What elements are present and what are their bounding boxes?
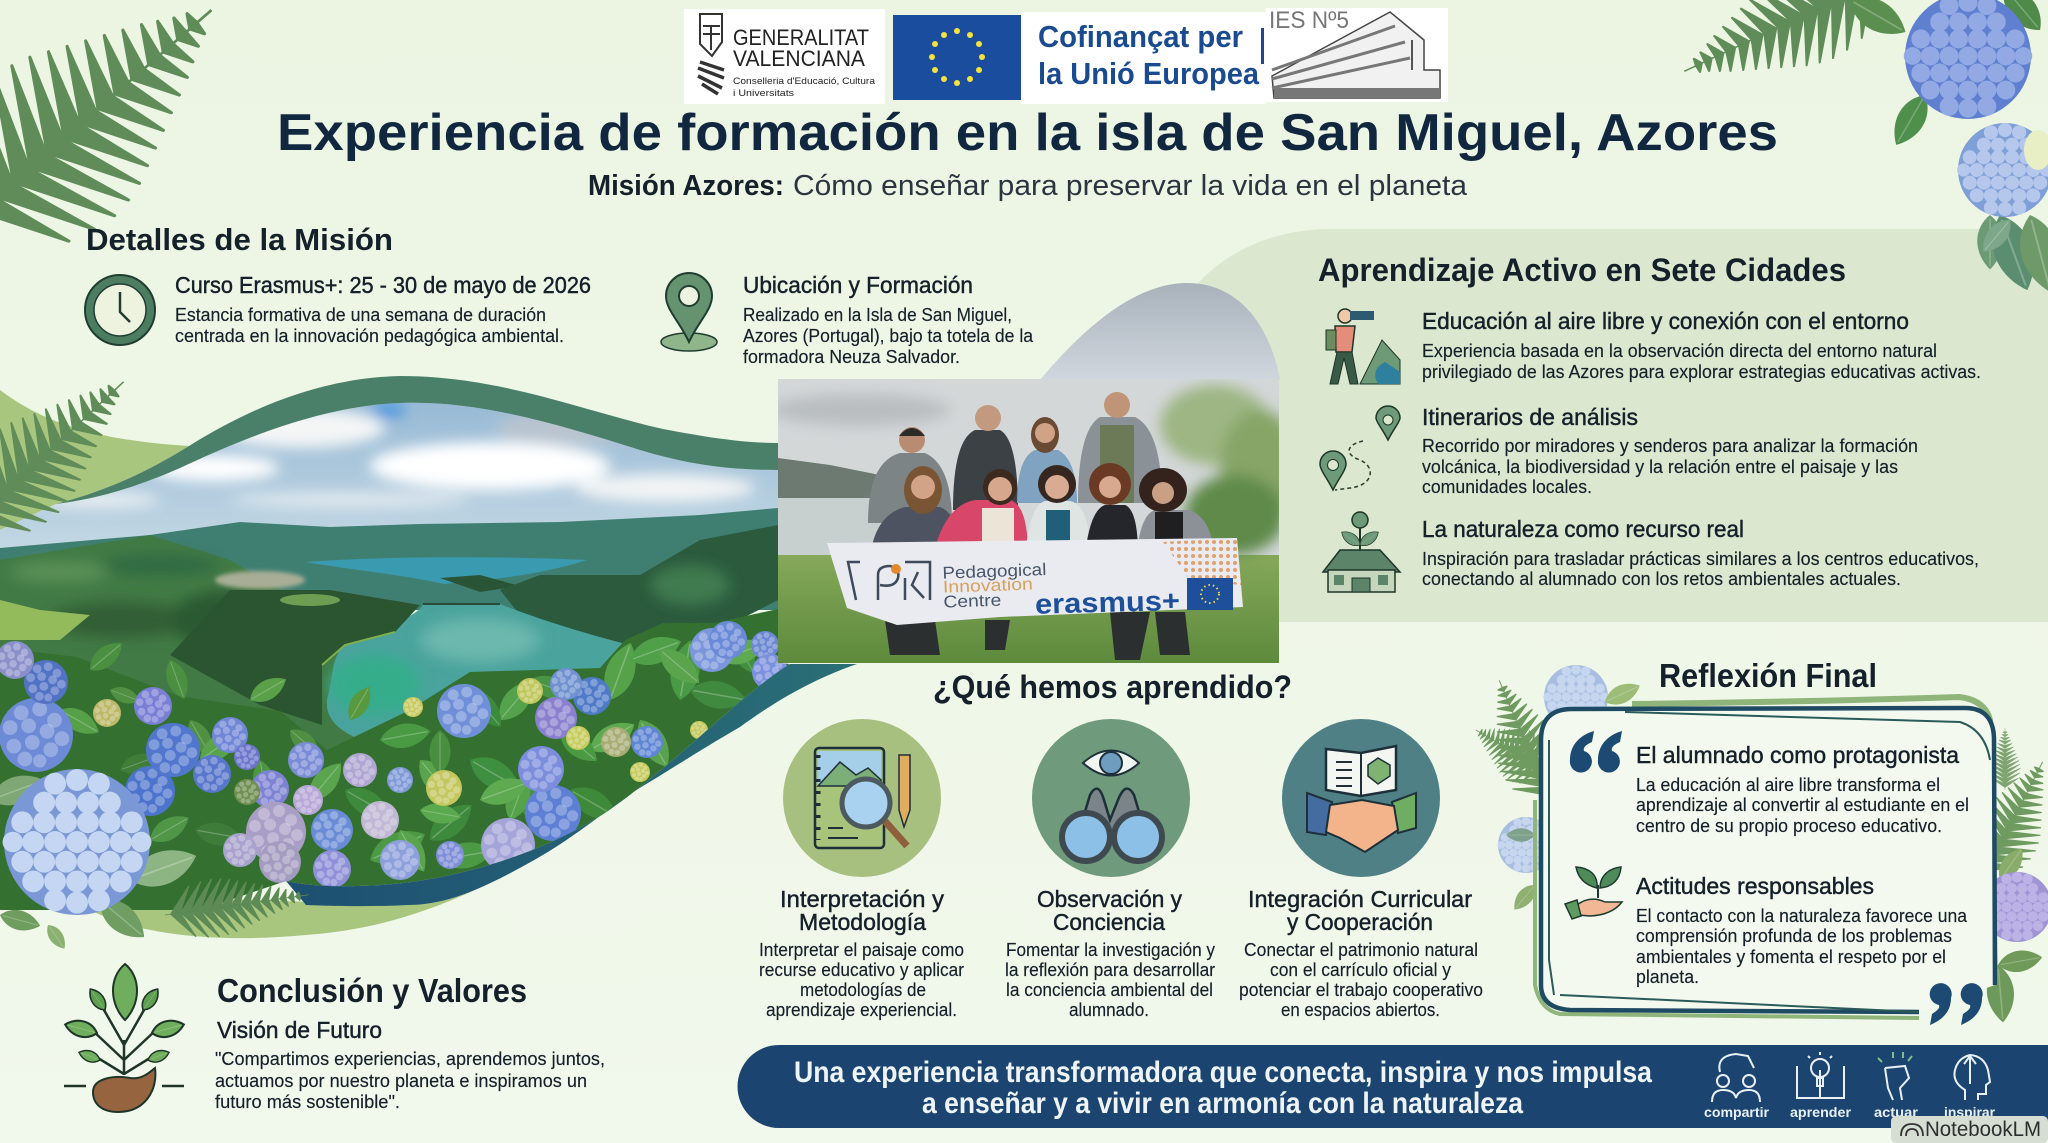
icon: location pin <box>661 273 717 351</box>
text block: Actitudes responsables <box>1636 873 1968 987</box>
florals around Reflexión Final frame <box>1462 665 2048 1024</box>
card: Observación y Conciencia: alumnado. <box>1069 999 1149 1020</box>
text block: La naturaleza como recurso real: Inspiración para trasladar prácticas similares a los centros educativos, <box>1422 548 1979 569</box>
banner: closing message: Una experiencia transformadora que conecta, inspira y nos impulsa <box>794 1056 1652 1089</box>
text block: Itinerarios de análisis: Recorrido por miradores y senderos para analizar la formación <box>1422 435 1918 456</box>
card: Integración Curricular y Cooperación: potenciar el trabajo cooperativo <box>1239 979 1483 1000</box>
card: Integración Curricular y Cooperación: con el carrículo oficial y <box>1270 959 1452 980</box>
card: Interpretación y Metodología: recurse educativo y aplicar <box>759 959 964 980</box>
photo: Erasmus+ banner: Centre <box>943 591 1002 612</box>
card: Interpretación y Metodología: Interpretación y <box>780 886 945 912</box>
card: Observación y Conciencia: Fomentar la investigación y <box>1006 939 1216 960</box>
text block: Conclusión y Valores: "Compartimos experiencias, aprendemos juntos, <box>215 1048 605 1069</box>
text block: El alumnado como protagonista <box>1636 742 1969 836</box>
logo: Generalitat Valenciana: Conselleria d'Educació, Cultura <box>733 76 876 87</box>
icon: clock <box>85 275 155 345</box>
card: Observación y Conciencia <box>1005 719 1216 1020</box>
icon: aprender: aprender <box>1790 1104 1852 1120</box>
icon: actuar <box>1874 1052 1919 1120</box>
logo: IES Nº5: IES Nº5 <box>1269 7 1349 34</box>
icon: book and handshake <box>1282 719 1440 877</box>
text block: Curso Erasmus+: Curso Erasmus+: 25 - 30 de mayo de 2026 <box>175 272 591 298</box>
text block: Curso Erasmus+: centrada en la innovación pedagógica ambiental. <box>175 325 564 346</box>
text block: Actitudes responsables: El contacto con la naturaleza favorece una <box>1636 905 1968 926</box>
icon: plant sprouting from seed <box>63 964 186 1112</box>
fern and big hydrangea, lower left <box>0 768 313 952</box>
text block: El alumnado como protagonista: aprendizaje al convertir al estudiante en el <box>1636 794 1969 815</box>
card: Observación y Conciencia: Conciencia <box>1053 909 1165 935</box>
text block: Ubicación y Formación: Ubicación y Formación <box>743 272 973 298</box>
text block: Itinerarios de análisis: volcánica, la biodiversidad y la relación entre el paisaje y las <box>1422 456 1898 477</box>
logo: Cofinançat per la Unió Europea: la Unió Europea <box>1038 56 1260 91</box>
subtitle: Cómo enseñar para preservar la vida en el planeta <box>793 170 1468 202</box>
logo: EU flag <box>893 15 1021 100</box>
text block: Actitudes responsables: Actitudes responsables <box>1636 873 1874 899</box>
card: Interpretación y Metodología: metodologías de <box>800 979 926 1000</box>
flower bed foliage <box>62 637 756 872</box>
card: Observación y Conciencia: la conciencia ambiental del <box>1006 979 1213 1000</box>
icon: notebook and magnifier <box>783 719 941 877</box>
decorative green swoosh, bottom <box>82 890 475 938</box>
hydrangea blooms <box>0 621 788 915</box>
icon: hiker with binoculars <box>1326 309 1400 384</box>
text block: Conclusión y Valores: Conclusión y Valores <box>217 972 527 1009</box>
icon: hand holding sprout <box>1565 867 1622 919</box>
heading: Aprendizaje Activo en Sete Cidades: Aprendizaje Activo en Sete Cidades <box>1318 252 1846 288</box>
text block: El alumnado como protagonista: El alumnado como protagonista <box>1636 742 1959 768</box>
icon: route between map pins <box>1320 406 1400 490</box>
heading: Qué hemos aprendido: ¿Qué hemos aprendido? <box>933 669 1292 705</box>
icon: compartir: compartir <box>1704 1104 1770 1120</box>
banner: closing message: a enseñar y a vivir en armonía con la naturaleza <box>922 1087 1523 1120</box>
logo: Generalitat Valenciana <box>684 9 885 104</box>
text block: El alumnado como protagonista: centro de su propio proceso educativo. <box>1636 815 1942 836</box>
photo: Erasmus+ banner: erasmus+ <box>1035 585 1180 620</box>
text block: Ubicación y Formación: Azores (Portugal), bajo ta totela de la <box>743 325 1034 346</box>
fern, top left <box>0 0 272 289</box>
text block: Itinerarios de análisis <box>1422 404 1918 497</box>
fern, mid left <box>0 344 158 562</box>
text block: Ubicación y Formación: formadora Neuza Salvador. <box>743 346 960 367</box>
text block: Conclusión y Valores: futuro más sostenible". <box>215 1091 400 1112</box>
card: Interpretación y Metodología: Interpretar el paisaje como <box>759 939 964 960</box>
text block: La naturaleza como recurso real: conectando al alumnado con los retos ambientales actuales. <box>1422 568 1901 589</box>
card: Integración Curricular y Cooperación: Integración Curricular <box>1248 886 1472 912</box>
text block: Educación al aire libre: Experiencia basada en la observación directa del entorno natural <box>1422 340 1937 361</box>
badge: NotebookLM watermark <box>1891 1116 2048 1143</box>
photo: back row people <box>868 392 1162 523</box>
text block: Conclusión y Valores: actuamos por nuestro planeta e inspiramos un <box>215 1070 587 1091</box>
text block: Actitudes responsables: comprensión profunda de los problemas <box>1636 925 1952 946</box>
photo: Erasmus+ banner: Pedagogical <box>942 560 1047 583</box>
title: Experiencia de formación en la isla de San Miguel, Azores <box>277 104 1778 162</box>
card: Interpretación y Metodología <box>759 719 964 1020</box>
photo: Erasmus+ banner: Innovation <box>943 575 1033 597</box>
group photo with Erasmus+ banner <box>770 379 1300 663</box>
text block: La naturaleza como recurso real: La naturaleza como recurso real <box>1422 516 1744 542</box>
logo: Generalitat Valenciana: i Universitats <box>733 88 794 99</box>
badge: NotebookLM watermark: NotebookLM <box>1925 1118 2041 1141</box>
text block: Itinerarios de análisis: comunidades locales. <box>1422 476 1592 497</box>
card: Interpretación y Metodología: aprendizaje experiencial. <box>766 999 957 1020</box>
text block: La naturaleza como recurso real <box>1422 516 1979 589</box>
dark green wave band <box>56 376 778 504</box>
text block: Educación al aire libre <box>1422 308 1981 382</box>
card: Integración Curricular y Cooperación: en espacios abiertos. <box>1281 999 1440 1020</box>
text block: Curso Erasmus+ <box>175 272 591 346</box>
text block: Conclusión y Valores <box>215 972 605 1112</box>
text block: Actitudes responsables: ambientales y fomenta el respeto por el <box>1636 946 1946 967</box>
card: Observación y Conciencia: Observación y <box>1037 886 1182 912</box>
icon: eye and binoculars <box>1032 719 1190 877</box>
text block: Ubicación y Formación: Realizado en la Isla de San Miguel, <box>743 304 1012 325</box>
teal wave band <box>286 664 857 906</box>
logo: IES Nº5 <box>1266 7 1448 102</box>
photo: front row people <box>872 463 1212 542</box>
logo: Cofinançat per la Unió Europea: Cofinançat per <box>1038 19 1243 54</box>
top right floral corner <box>1663 0 2048 297</box>
logo: Generalitat Valenciana: VALENCIANA <box>733 46 865 71</box>
text block: Educación al aire libre: Educación al aire libre y conexión con el entorno <box>1422 308 1909 334</box>
banner: closing message <box>738 1045 2048 1128</box>
photo backdrop: cloudy sky arch <box>1040 283 1280 380</box>
icon: compartir <box>1704 1054 1770 1120</box>
text block: Itinerarios de análisis: Itinerarios de análisis <box>1422 404 1638 430</box>
text block: Actitudes responsables: planeta. <box>1636 966 1699 987</box>
heading: Reflexión Final: Reflexión Final <box>1659 657 1877 694</box>
icon: aprender <box>1790 1052 1852 1120</box>
icon: actuar: actuar <box>1874 1104 1919 1120</box>
landscape: Sete Cidades lakes and hydrangeas <box>0 370 800 915</box>
icon: school with flower <box>1323 512 1400 592</box>
text block: Curso Erasmus+: Estancia formativa de una semana de duración <box>175 304 546 325</box>
photo: Erasmus+ banner <box>827 538 1243 625</box>
text block: Conclusión y Valores: Visión de Futuro <box>217 1017 382 1043</box>
text block: El alumnado como protagonista: La educación al aire libre transforma el <box>1636 774 1940 795</box>
panel: Reflexión Final frame <box>1535 697 1995 1018</box>
card: Integración Curricular y Cooperación <box>1239 719 1483 1020</box>
text block: Ubicación y Formación <box>743 272 1034 367</box>
card: Integración Curricular y Cooperación: Conectar el patrimonio natural <box>1244 939 1478 960</box>
icon: inspirar <box>1944 1055 1996 1120</box>
panel: Aprendizaje Activo background <box>1185 229 2048 622</box>
icon: closing quote mark <box>1930 983 1983 1025</box>
heading: Detalles de la Misión: Detalles de la Misión <box>86 222 393 257</box>
decorative green swoosh, left <box>0 390 189 530</box>
card: Interpretación y Metodología: Metodología <box>799 909 926 935</box>
text block: Educación al aire libre: privilegiado de las Azores para explorar estrategias educativas activas. <box>1422 361 1981 382</box>
card: Observación y Conciencia: la reflexión para desarrollar <box>1005 959 1215 980</box>
subtitle: Misión Azores: <box>588 170 784 202</box>
icon: inspirar: inspirar <box>1944 1104 1996 1120</box>
logo: Generalitat Valenciana: GENERALITAT <box>733 25 869 50</box>
logos header <box>684 7 1448 104</box>
logo: Cofinançat per la Unió Europea <box>1021 12 1266 104</box>
icon: opening quote mark <box>1570 731 1622 773</box>
card: Integración Curricular y Cooperación: y Cooperación <box>1287 909 1433 935</box>
